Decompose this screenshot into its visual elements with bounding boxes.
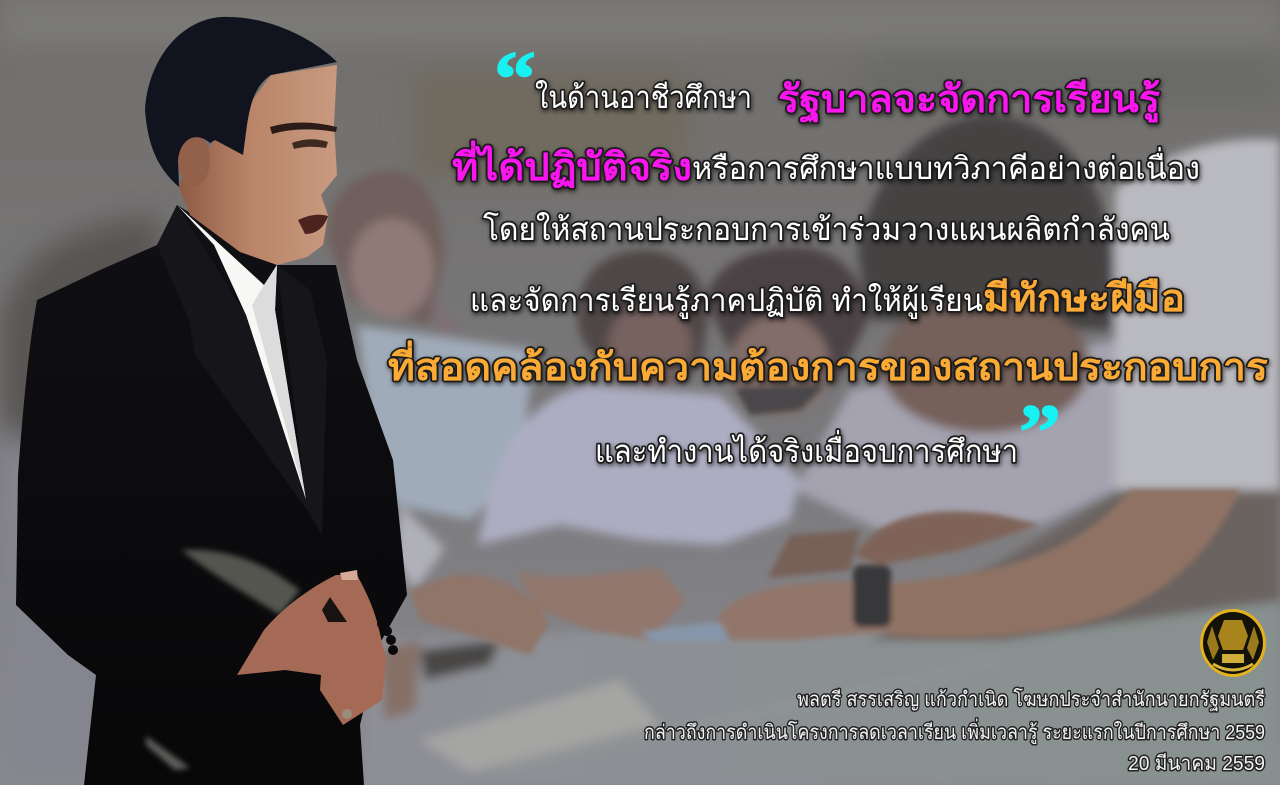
shirts <box>1115 139 1280 490</box>
students' arms and hands <box>885 490 1240 638</box>
quote line 6: และทำงานได้จริงเมื่อจบการศึกษา <box>595 430 1018 469</box>
quote line 4: มีทักษะฝีมือ <box>983 278 1185 320</box>
students' heads <box>578 250 707 384</box>
suit <box>16 205 407 785</box>
suit sheen <box>182 550 300 615</box>
mouth <box>298 215 328 234</box>
beaded bracelet <box>377 620 398 655</box>
shirt <box>177 205 306 500</box>
girl student <box>357 325 535 520</box>
right student dark hair <box>858 115 1112 330</box>
table <box>365 605 1280 785</box>
ear <box>178 134 210 186</box>
closing quote mark: ” <box>1019 388 1061 475</box>
hair <box>145 17 337 187</box>
quote line 2: หรือการศึกษาแบบทวิภาคีอย่างต่อเนื่อง <box>692 147 1200 186</box>
quote line 1: ในด้านอาชีวศึกษา <box>535 80 752 115</box>
neck and face <box>178 65 337 265</box>
quote line 2 <box>452 140 1200 189</box>
quote line 5: ที่สอดคล้องกับความต้องการของสถานประกอบการ <box>388 340 1269 389</box>
hands <box>237 575 386 725</box>
quote line 1 <box>535 79 1161 124</box>
opening quote mark: “ <box>494 35 536 122</box>
quote line 4: และจัดการเรียนรู้ภาคปฏิบัติ ทำให้ผู้เรียน <box>470 283 983 319</box>
quote line 3: โดยให้สถานประกอบการเข้าร่วมวางแผนผลิตกำลังคน <box>483 212 1170 247</box>
icon: government emblem <box>1200 609 1266 677</box>
quote line 1: รัฐบาลจะจัดการเรียนรู้ <box>778 79 1161 124</box>
speaker attribution <box>644 688 1265 775</box>
speaker attribution: 20 มีนาคม 2559 <box>1128 753 1265 775</box>
lapel <box>157 205 327 535</box>
man in black suit <box>16 17 407 785</box>
quote line 4 <box>470 278 1185 320</box>
quote line 2: ที่ได้ปฏิบัติจริง <box>452 140 692 189</box>
